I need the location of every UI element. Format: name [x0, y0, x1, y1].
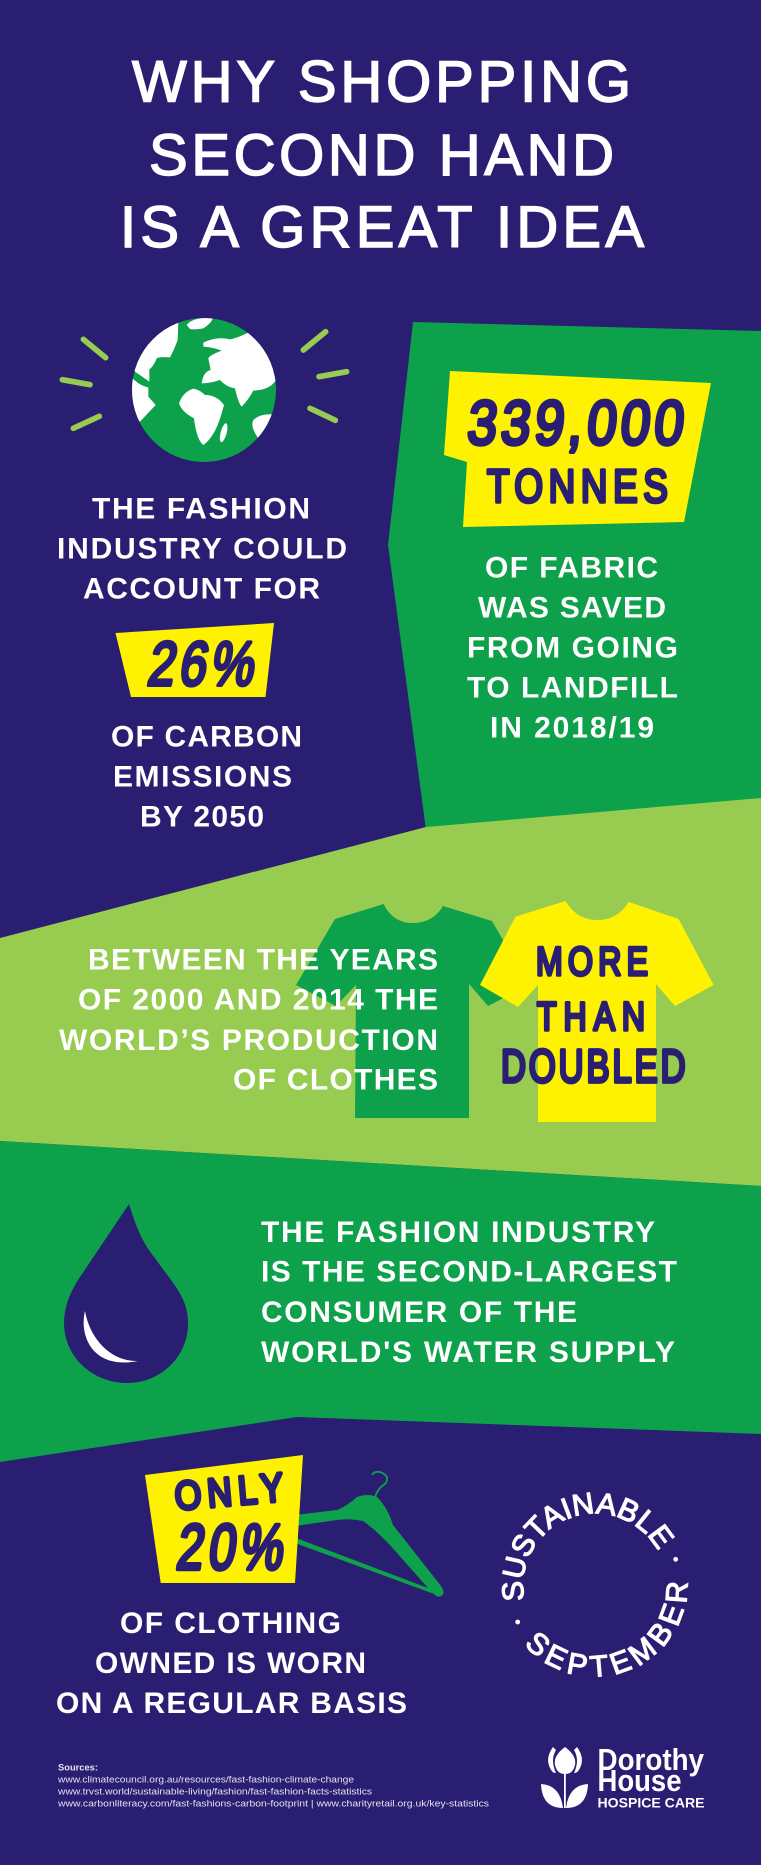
text block: fashion industry could account for: ACCOUNT FOR [83, 572, 320, 606]
text block: between the years: OF CLOTHES [233, 1064, 438, 1096]
icon: coat hanger [295, 1472, 444, 1597]
text block: of clothing owned: OWNED IS WORN [95, 1647, 366, 1680]
text block: sources: www.carbonliteracy.com/fast-fashions-carbon-footprint | www.charityretail.org.uk/key-statistics [57, 1798, 489, 1810]
text block: second-largest water consumer: THE FASHION INDUSTRY [261, 1216, 655, 1249]
text block: of fabric saved: OF FABRIC [485, 552, 658, 584]
text block: sources: www.climatecouncil.org.au/resources/fast-fashion-climate-change [57, 1774, 354, 1786]
callout: more than doubled [501, 939, 686, 1092]
text block: of clothing owned: ON A REGULAR BASIS [56, 1687, 407, 1720]
text block: of fabric saved: IN 2018/19 [490, 712, 654, 744]
text block: second-largest water consumer: WORLD'S WATER SUPPLY [261, 1336, 675, 1369]
text block: between the years: WORLD’S PRODUCTION [59, 1024, 438, 1057]
title: IS A GREAT IDEA [120, 195, 644, 260]
callout: more than doubled: THAN [537, 994, 645, 1039]
icon: yellow t-shirt [480, 901, 714, 1122]
text block: fashion industry could account for [57, 492, 347, 606]
panel: green water band [0, 1141, 761, 1462]
callout: only 20%: 20% [173, 1512, 290, 1584]
badge: sustainable september: SEPTEMBER [526, 1582, 688, 1678]
callout: 339,000 tonnes: TONNES [487, 460, 668, 512]
text block: of fabric saved [467, 552, 678, 744]
callout: more than doubled: MORE [536, 939, 648, 984]
text block: of clothing owned: OF CLOTHING [120, 1607, 341, 1640]
logo: Dorothy House Hospice Care: HOSPICE CARE [598, 1794, 704, 1810]
text block: sources: www.trvst.world/sustainable-living/fashion/fast-fashion-facts-statistics [57, 1786, 372, 1798]
text block: between the years [59, 944, 438, 1096]
text block: of fabric saved: WAS SAVED [478, 592, 666, 624]
badge: sustainable september: SUSTAINABLE [502, 1492, 675, 1600]
badge: sustainable september [502, 1492, 688, 1678]
text block: of carbon emissions by 2050: EMISSIONS [113, 760, 292, 794]
callout: 26% [116, 623, 274, 698]
icon: water drop [64, 1204, 188, 1383]
text block: second-largest water consumer [261, 1216, 677, 1369]
text block: sources [57, 1762, 489, 1810]
text block: fashion industry could account for: THE FASHION [92, 492, 310, 526]
icon: globe with rays [62, 318, 347, 462]
callout: 26%: 26% [144, 629, 262, 698]
callout: only 20% [145, 1455, 303, 1584]
callout: only 20%: ONLY [173, 1464, 285, 1519]
text block: of clothing owned [56, 1607, 407, 1720]
text block: second-largest water consumer: IS THE SECOND-LARGEST [261, 1256, 677, 1288]
logo: Dorothy House Hospice Care: Dorothy [598, 1742, 705, 1777]
text block: of fabric saved: TO LANDFILL [467, 672, 678, 704]
callout: 339,000 tonnes: 339,000 [465, 389, 688, 458]
text block: fashion industry could account for: INDUSTRY COULD [57, 532, 347, 566]
callout: 339,000 tonnes [444, 371, 711, 527]
panel: green fabric background [388, 322, 761, 830]
text block: between the years: BETWEEN THE YEARS [88, 944, 438, 976]
text block: of carbon emissions by 2050 [111, 720, 302, 834]
callout: more than doubled: DOUBLED [501, 1040, 686, 1092]
text block: between the years: OF 2000 AND 2014 THE [78, 984, 438, 1016]
text block: sources: Sources: [58, 1762, 98, 1774]
title: WHY SHOPPING [132, 50, 631, 114]
icon: green t-shirt [296, 904, 529, 1118]
text block: of fabric saved: FROM GOING [467, 632, 678, 664]
logo: Dorothy House Hospice Care [541, 1742, 705, 1810]
text block: second-largest water consumer: CONSUMER OF THE [261, 1296, 577, 1329]
title: SECOND HAND [149, 123, 614, 188]
title [120, 50, 644, 260]
logo: Dorothy House Hospice Care: House [598, 1763, 682, 1798]
panel: light green clothes band [0, 798, 761, 1186]
text block: of carbon emissions by 2050: BY 2050 [140, 800, 264, 834]
text block: of carbon emissions by 2050: OF CARBON [111, 720, 302, 754]
